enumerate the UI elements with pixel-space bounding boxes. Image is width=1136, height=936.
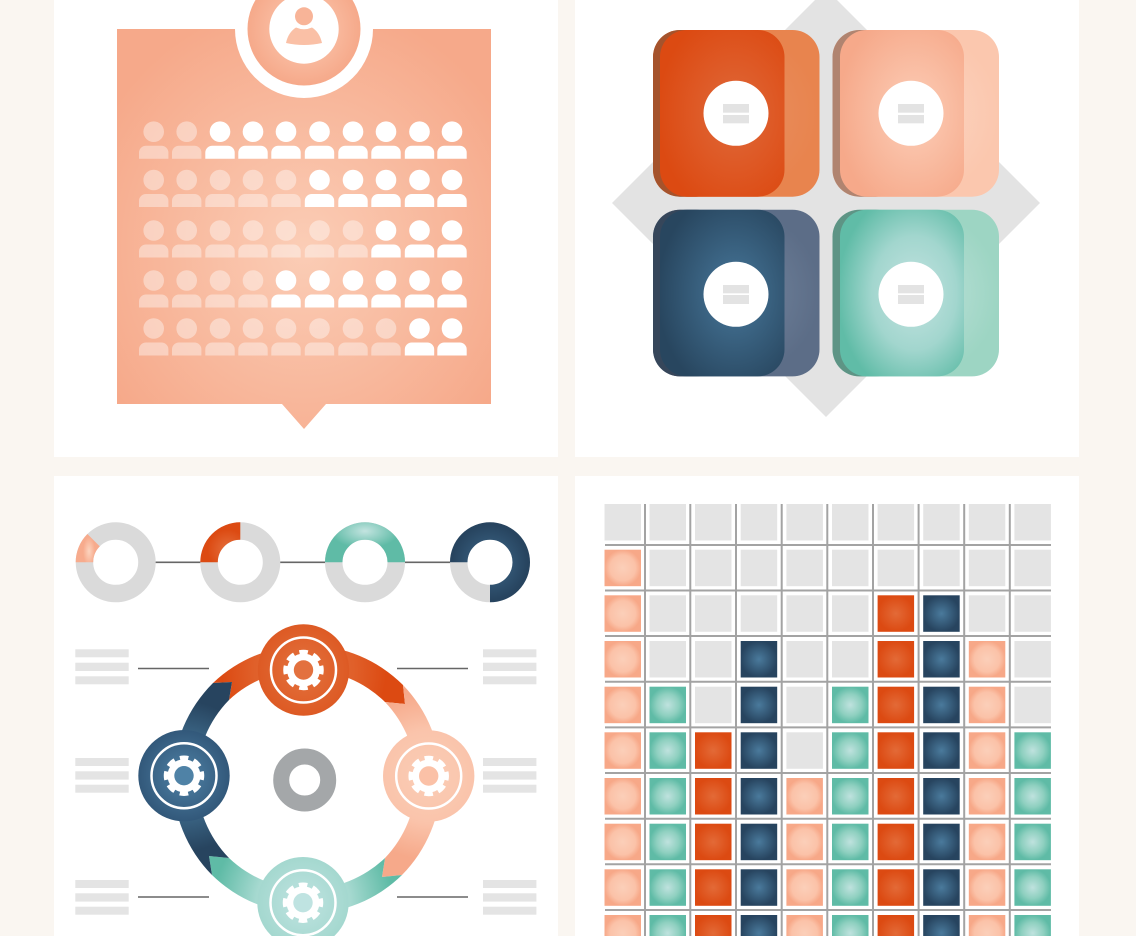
center ring — [281, 756, 328, 804]
text placeholder: bottom left — [75, 880, 129, 915]
people pictogram: row 1 — [139, 121, 467, 159]
text placeholder: middle left — [75, 758, 129, 793]
donut 1: one eighth peach — [84, 531, 147, 594]
gear node: peach — [383, 730, 474, 822]
grid lines — [605, 504, 1051, 936]
donut 2: one quarter orange — [209, 531, 272, 594]
card: navy — [653, 210, 820, 376]
panel: waffle column chart — [575, 476, 1079, 936]
grey diamond backdrop — [612, 0, 1040, 417]
donut connector lines — [155, 561, 451, 563]
donut 4: three quarters navy — [459, 531, 521, 594]
speech bubble card — [117, 29, 491, 429]
column 9: peach — [969, 504, 1005, 936]
cycle arrow: teal — [209, 856, 402, 914]
cycle arrow: peach — [382, 685, 441, 877]
column 6: teal — [832, 504, 868, 936]
gear node: navy — [138, 730, 230, 821]
people pictogram: row 3 — [139, 220, 467, 258]
card: teal — [832, 210, 999, 376]
column 5: peach — [786, 504, 823, 936]
column 7: orange — [878, 504, 914, 936]
column 4: navy — [741, 504, 777, 936]
text placeholder: top right — [483, 649, 536, 684]
panel: people grid — [54, 0, 558, 457]
gear node: orange — [258, 624, 349, 716]
card: peach — [832, 30, 999, 197]
text placeholder: top left — [75, 649, 129, 684]
people pictogram: row 2 — [139, 170, 467, 207]
column 10: teal — [1014, 504, 1051, 936]
icon: person badge — [235, 0, 373, 98]
cycle arrow: navy — [173, 682, 232, 875]
column 1: peach — [604, 504, 641, 936]
card: orange — [653, 30, 820, 197]
gear node: teal — [257, 857, 349, 936]
text placeholder: middle right — [483, 758, 536, 793]
donut 3: half teal — [334, 531, 396, 594]
column 3: orange — [695, 504, 732, 936]
panel: four cards on diamond — [575, 0, 1079, 457]
column 8: navy — [923, 504, 960, 936]
panel: donuts and gear cycle — [54, 476, 558, 936]
cycle arrow: orange — [213, 645, 405, 704]
people pictogram: row 5 — [139, 318, 467, 356]
people pictogram: row 4 — [139, 270, 467, 308]
leader lines — [138, 668, 468, 897]
text placeholder: bottom right — [483, 880, 536, 915]
column 2: teal — [650, 504, 686, 936]
